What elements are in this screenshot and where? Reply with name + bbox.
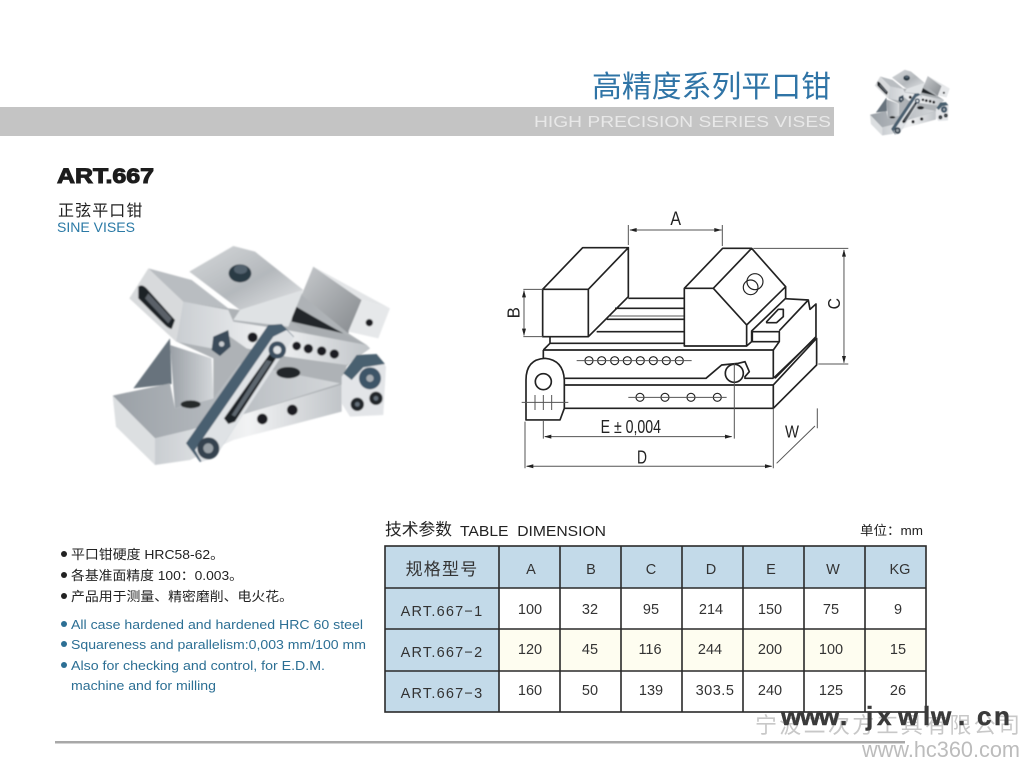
dimension table: 125 <box>819 683 843 699</box>
technical drawing: W <box>785 421 799 441</box>
photo: sine vise <box>113 246 390 465</box>
icon: vise thumbnail <box>870 70 950 136</box>
dimension table: 214 <box>699 602 723 618</box>
product name <box>57 202 144 235</box>
feature list: Chinese <box>61 547 293 604</box>
dimension table: 160 <box>518 683 542 699</box>
dimension table: ART.667−2 <box>401 645 483 661</box>
dimension table: 50 <box>582 683 598 699</box>
dimension table: 240 <box>758 683 782 699</box>
dimension table: C <box>646 562 656 578</box>
dimension table: 139 <box>639 683 663 699</box>
watermark: jxwlw url: www.jxwlw.cn <box>780 701 1010 731</box>
technical drawing <box>503 209 848 468</box>
dimension table: 26 <box>890 683 906 699</box>
header band <box>0 107 834 136</box>
dimension table: 45 <box>582 642 598 658</box>
table heading: 技术参数 <box>385 520 453 539</box>
unit note: 单位：mm <box>860 523 923 538</box>
dimension table: 95 <box>643 602 659 618</box>
dimension table: B <box>586 562 596 578</box>
feature list: Chinese: 各基准面精度 100：0.003。 <box>71 568 243 583</box>
dimension table: 规格型号 <box>406 560 478 579</box>
subtitle: English heading: HIGH PRECISION SERIES VISES <box>534 114 831 131</box>
watermark: company name: 宁波二次方工具有限公司 <box>755 713 1020 738</box>
dimension table: D <box>706 562 716 578</box>
dimension table: 9 <box>894 602 902 618</box>
technical drawing: B <box>503 307 523 318</box>
dimension table: 100 <box>518 602 542 618</box>
technical drawing: E ± 0,004 <box>601 416 661 437</box>
dimension table: 100 <box>819 642 843 658</box>
dimension table: 75 <box>823 602 839 618</box>
dimension table: 120 <box>518 642 542 658</box>
table heading <box>385 520 606 540</box>
dimension table: 200 <box>758 642 782 658</box>
product name: 正弦平口钳 <box>58 202 144 220</box>
feature list: English <box>61 617 366 693</box>
feature list: Chinese: 产品用于测量、精密磨削、电火花。 <box>71 589 293 604</box>
dimension table: A <box>526 562 536 578</box>
feature list: English: Also for checking and control, for E.D.M. <box>71 658 325 673</box>
table heading: TABLE DIMENSION <box>460 523 606 540</box>
technical drawing: A <box>670 209 681 230</box>
product name: SINE VISES <box>57 219 135 235</box>
dimension table: 303.5 <box>696 683 734 699</box>
footer rule <box>55 741 905 744</box>
dimension table: KG <box>890 562 910 578</box>
feature list: Chinese: 平口钳硬度 HRC58-62。 <box>71 547 224 562</box>
dimension table: E <box>766 562 776 578</box>
product code heading: ART.667 <box>57 165 154 188</box>
title: Chinese heading: 高精度系列平口钳 <box>592 71 831 104</box>
feature list: English: machine and for milling <box>71 678 216 693</box>
dimension table: 150 <box>758 602 782 618</box>
dimension table: ART.667−1 <box>401 604 483 620</box>
dimension table: 244 <box>698 642 722 658</box>
technical drawing: D <box>637 446 647 467</box>
feature list: English: All case hardened and hardened HRC 60 steel <box>71 617 363 632</box>
dimension table: ART.667−3 <box>401 686 483 702</box>
technical drawing: C <box>824 298 844 309</box>
dimension table: 116 <box>638 642 662 658</box>
dimension table: 15 <box>890 642 906 658</box>
dimension table: 32 <box>582 602 598 618</box>
feature list: English: Squareness and parallelism:0,003 mm/100 mm <box>71 637 366 652</box>
dimension table <box>385 546 926 712</box>
dimension table: W <box>826 562 840 578</box>
